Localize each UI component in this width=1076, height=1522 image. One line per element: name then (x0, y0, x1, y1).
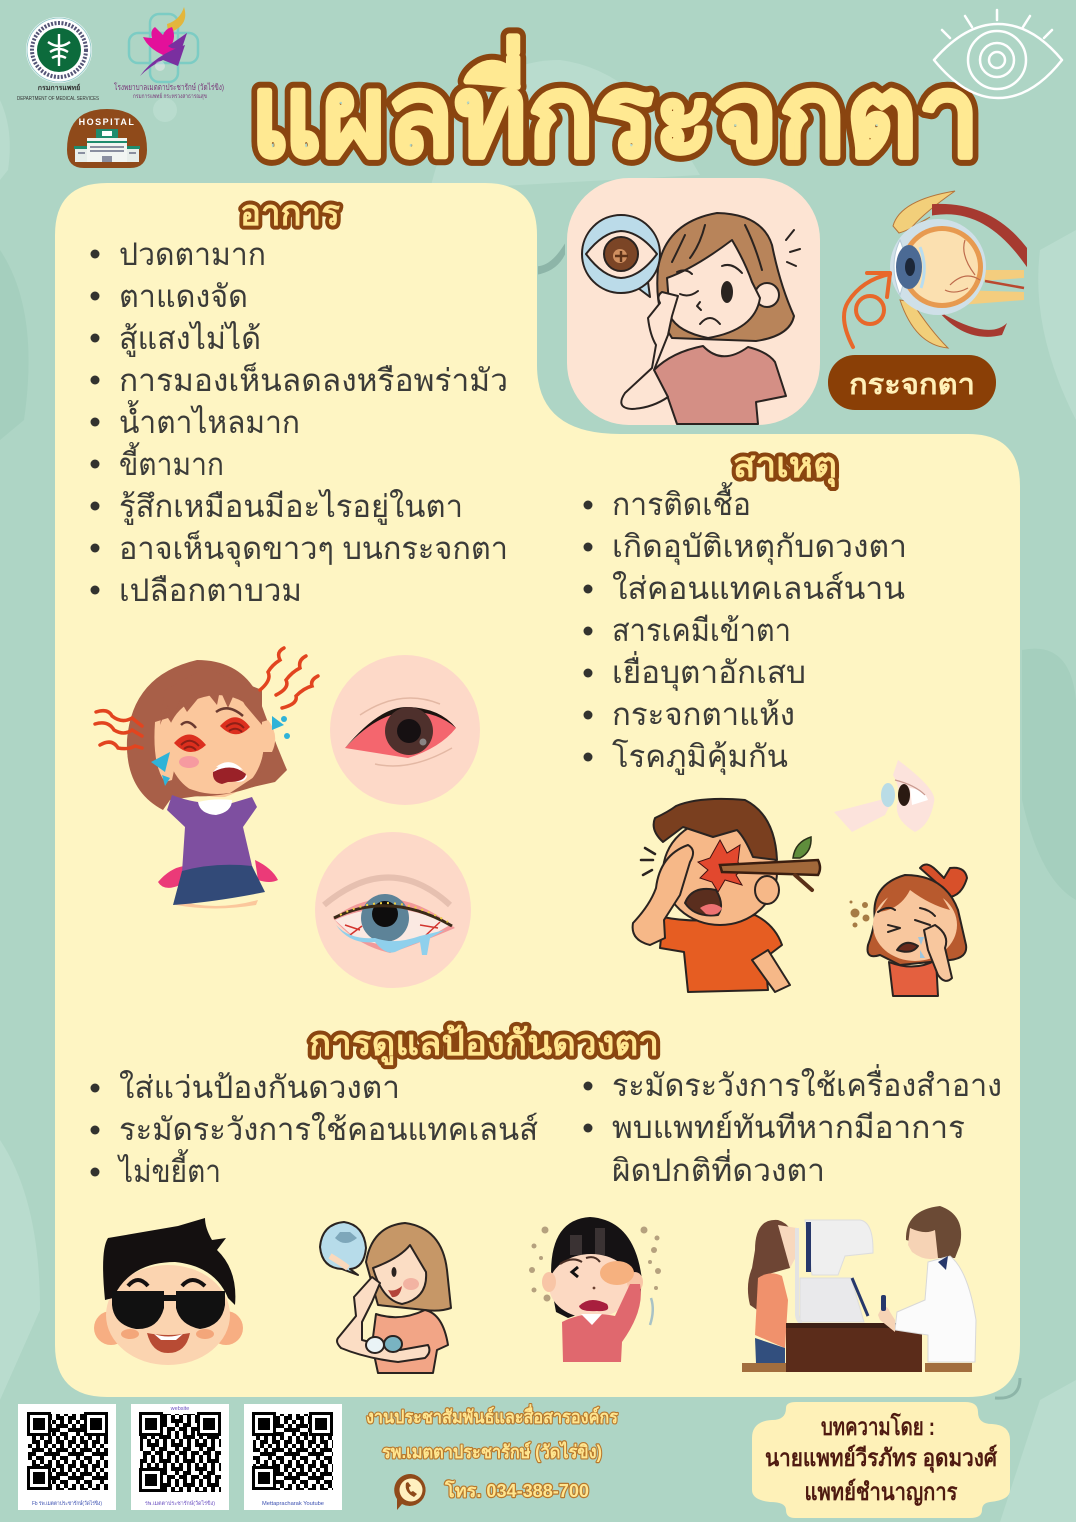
logo: metta hospital lotus: โรงพยาบาลเมตตาประชารักษ์ (วัดไร่ขิง) (114, 82, 224, 92)
label: cornea: กระจกตา (849, 369, 975, 401)
list: causes: ใส่คอนแทคเลนส์นาน (612, 571, 905, 606)
qr code 3: Mettapracharak Youtube (262, 1501, 324, 1507)
illustration: boy with stick in eye (633, 799, 820, 992)
heading: care and prevention: การดูแลป้องกันดวงตา (309, 1022, 659, 1066)
title: แผลที่กระจกตา (250, 35, 980, 181)
list: causes: เยื่อบุตาอักเสบ (612, 651, 806, 692)
illustration: girl with dust in eye (850, 864, 967, 996)
main cream panel (55, 183, 1020, 1397)
icon: eye outline (934, 10, 1062, 98)
list: prevention left: ไม่ขยี้ตา (116, 1149, 221, 1189)
qr code 2: รพ.เมตตาประชารักษ์(วัดไร่ขิง) (145, 1500, 215, 1507)
arrow: to cornea (844, 273, 890, 347)
illustration: eye anatomy (890, 191, 1024, 348)
illustration: boy with sunglasses (94, 1218, 243, 1365)
illustration: woman using contact lens (320, 1222, 451, 1373)
heading: symptoms: อาการ (240, 192, 341, 233)
panel: author: แพทย์ชำนาญการ (804, 1478, 958, 1506)
logo: hospital badge: HOSPITAL (79, 117, 135, 127)
list: prevention right: ผิดปกติที่ดวงตา (612, 1149, 825, 1188)
panel: author: บทความโดย : (821, 1412, 935, 1441)
list: causes: กระจกตาแห้ง (612, 697, 795, 732)
list: prevention right: ระมัดระวังการใช้เครื่องสำอาง (612, 1064, 1002, 1103)
logo: ministry of public health: DEPARTMENT OF MEDICAL SERVICES (17, 96, 99, 102)
logo: ministry of public health (17, 17, 99, 102)
list: prevention left (90, 1070, 538, 1189)
list: symptoms: เปลือกตาบวม (119, 573, 302, 608)
logo: metta hospital lotus: กรมการแพทย์ กระทรวงสาธารณสุข (133, 92, 207, 100)
panel: woman with corneal ulcer (567, 178, 820, 425)
illustration: woman rubbing eye (529, 1217, 661, 1362)
logo: metta hospital lotus (114, 7, 224, 100)
list: symptoms: การมองเห็นลดลงหรือพร่ามัว (119, 362, 508, 398)
icon: pain waves (95, 648, 318, 749)
label: cornea (828, 355, 996, 410)
panel: author (752, 1402, 1010, 1518)
heading: causes: สาเหตุ (733, 444, 837, 488)
list: symptoms: รู้สึกเหมือนมีอะไรอยู่ในตา (119, 489, 463, 525)
title: แผลที่กระจกตา (250, 35, 980, 181)
list: causes: การติดเชื้อ (612, 482, 751, 522)
list: causes: โรคภูมิคุ้มกัน (612, 739, 788, 776)
footer: phone number: โทร. 034-388-700 (444, 1480, 589, 1501)
logo: ministry of public health: กรมการแพทย์ (38, 83, 80, 92)
list: symptoms: ปวดตามาก (119, 237, 266, 272)
illustration: contact lens on eye (834, 760, 934, 832)
illustration: red eye (330, 655, 480, 805)
footer: department text: งานประชาสัมพันธ์และสื่อสารองค์กร (366, 1404, 618, 1427)
qr code 2: website (170, 1406, 189, 1412)
qr code 1: Fb รพ.เมตตาประชารักษ์(วัดไร่ขิง) (32, 1500, 102, 1507)
list: prevention left: ระมัดระวังการใช้คอนแทคเลนส์ (119, 1112, 538, 1147)
list: prevention left: ใส่แว่นป้องกันดวงตา (119, 1070, 400, 1105)
list: symptoms: อาจเห็นจุดขาวๆ บนกระจกตา (119, 530, 508, 568)
illustration: shirt and arm (621, 292, 786, 424)
list: symptoms (90, 237, 508, 608)
panel: author: นายแพทย์วีรภัทร อุดมวงศ์ (765, 1444, 998, 1474)
illustration: eye exam with doctor (742, 1206, 976, 1372)
list: symptoms: สู้แสงไม่ได้ (119, 321, 261, 357)
list: causes (584, 482, 907, 776)
qr code 3 (244, 1404, 342, 1510)
list: symptoms: น้ำตาไหลมาก (119, 400, 300, 440)
list: prevention right (584, 1064, 1002, 1188)
icon: speech bubble with damaged eye (582, 215, 660, 297)
list: prevention right: พบแพทย์ทันทีหากมีอาการ (612, 1110, 965, 1145)
list: causes: เกิดอุบัติเหตุกับดวงตา (612, 529, 907, 566)
list: symptoms: ขี้ตามาก (119, 442, 224, 482)
illustration: hair and face (657, 213, 800, 341)
footer: department text (366, 1404, 618, 1462)
illustration: infected eye (315, 832, 471, 988)
footer: department text: รพ.เมตตาประชารักษ์ (วัดไร่ขิง) (382, 1441, 602, 1462)
icon: phone (394, 1474, 426, 1510)
list: symptoms: ตาแดงจัด (119, 279, 248, 314)
list: causes: สารเคมีเข้าตา (612, 613, 791, 648)
qr code 2 (131, 1404, 229, 1510)
illustration: crying girl with red eyes (95, 648, 318, 908)
qr code 1 (18, 1404, 116, 1510)
logo: hospital badge (67, 109, 147, 168)
